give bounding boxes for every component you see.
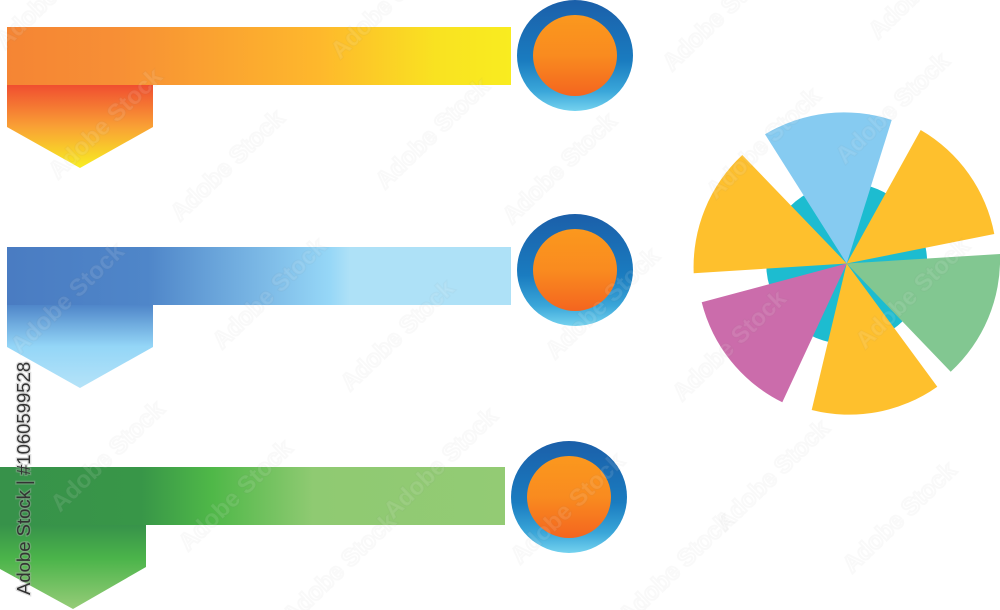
banner 3: green <box>0 467 505 609</box>
watermark tiles: Adobe Stock <box>830 48 955 169</box>
watermark tiles: Adobe Stock <box>335 275 460 396</box>
segmented pie chart <box>694 112 1000 415</box>
watermark tiles: Adobe Stock <box>497 108 622 229</box>
badge 2: blue ring with orange circle <box>517 214 633 326</box>
watermark tiles: Adobe Stock <box>667 285 792 406</box>
watermark tiles: Adobe Stock <box>701 83 826 204</box>
watermark tiles: Adobe Stock <box>165 105 290 226</box>
watermark tiles: Adobe Stock <box>378 403 503 524</box>
watermark tiles: Adobe Stock <box>505 448 630 569</box>
vertical stock id text: Adobe Stock | #1060599528 <box>13 362 34 595</box>
badge 3: blue ring with orange circle <box>511 441 627 553</box>
watermark tiles: Adobe Stock <box>710 415 835 536</box>
watermark tiles: Adobe Stock <box>5 238 130 359</box>
pie: yellow wedge bottom <box>812 264 937 415</box>
pie: yellow wedge upper right <box>847 130 994 264</box>
banner 1 pointed tab <box>7 85 153 168</box>
banner 2 pointed tab <box>7 305 153 388</box>
watermark tiles: Adobe Stock <box>540 243 665 364</box>
banner 1 bar <box>7 27 511 85</box>
watermark tiles: Adobe Stock <box>173 435 298 556</box>
watermark tiles: Adobe Stock <box>850 233 975 354</box>
watermark tiles: Adobe Stock <box>207 233 332 354</box>
banner 2: blue to light blue <box>7 247 511 388</box>
banner 3 pointed tab <box>0 525 146 609</box>
pie: yellow wedge left <box>694 155 847 273</box>
banner 1: orange to yellow <box>7 27 511 168</box>
pie: teal centre disc <box>766 183 927 344</box>
watermark tiles: Adobe Stock <box>43 63 168 184</box>
pie: purple wedge <box>702 264 847 402</box>
banner 3 bar <box>0 467 505 525</box>
banner 2 bar <box>7 247 511 305</box>
pie: light blue wedge <box>765 112 892 263</box>
watermark tiles: Adobe Stock <box>370 73 495 194</box>
watermark tiles: Adobe Stock <box>45 396 170 517</box>
badge 1: blue ring with orange circle <box>517 0 633 111</box>
watermark tiles: Adobe Stock <box>837 457 962 578</box>
pie: green wedge <box>847 254 1000 372</box>
